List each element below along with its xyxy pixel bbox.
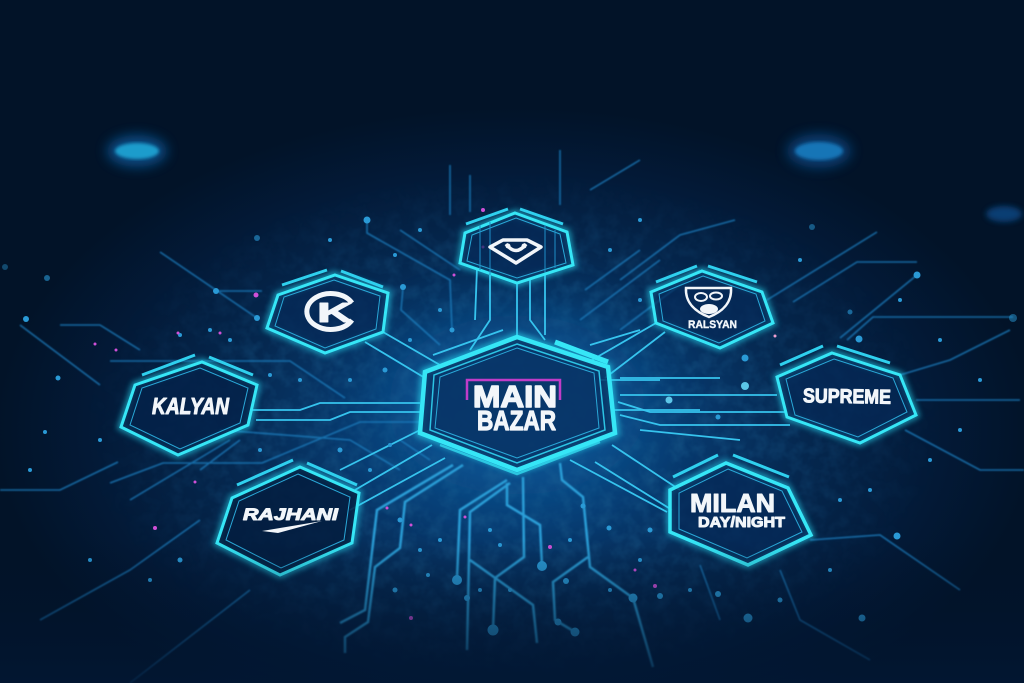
- label: Day/Night: DAY/NIGHT: [698, 514, 785, 531]
- node: Supreme: [777, 346, 916, 443]
- icon: Rajhani swoosh: [262, 521, 322, 533]
- cyan connector lines to the central hub: [250, 268, 790, 512]
- central hub: Main Bazar: [420, 337, 615, 474]
- frame: Kalyan hexagon: [121, 355, 257, 455]
- frame: Rajhani hexagon: [217, 460, 359, 575]
- accent: magenta bracket: [467, 380, 560, 400]
- node: top diamond: [460, 209, 573, 283]
- glowing light spots: [107, 134, 1022, 222]
- icon: shield: [686, 288, 731, 317]
- label: Rajhani: RAJHANI: [243, 505, 340, 524]
- magenta sparks: [94, 208, 776, 620]
- label: Main: MAIN: [473, 379, 557, 414]
- icon: K circle logo: K: [317, 297, 353, 328]
- node: K logo: [267, 270, 388, 353]
- node: Kalyan: [121, 355, 257, 455]
- label: Bazar: BAZAR: [477, 405, 556, 436]
- frame: top hexagon: [460, 209, 573, 283]
- background: [54, 144, 976, 660]
- scattered circuit nodes: [2, 216, 1017, 636]
- frame: K hexagon: [267, 270, 388, 353]
- label: Supreme: SUPREME: [803, 385, 891, 409]
- bottom vignette: [0, 540, 1024, 683]
- label: Ralsyan: RALSYAN: [688, 319, 737, 331]
- node: Rajhani: [217, 460, 359, 575]
- frame: central hexagon: [420, 337, 615, 474]
- frame: Milan hexagon: [670, 455, 811, 565]
- icon: diamond emblem: [490, 240, 541, 263]
- label: Kalyan: KALYAN: [152, 393, 229, 419]
- circuit traces flowing to the bottom: [340, 463, 653, 667]
- dim circuit traces: [0, 150, 1024, 683]
- frame: Ralsyan hexagon: [651, 266, 773, 348]
- node: Ralsyan: [651, 266, 773, 348]
- label: Milan: MILAN: [690, 488, 775, 518]
- frame: Supreme hexagon: [777, 346, 916, 443]
- node: Milan Day/Night: [670, 455, 811, 565]
